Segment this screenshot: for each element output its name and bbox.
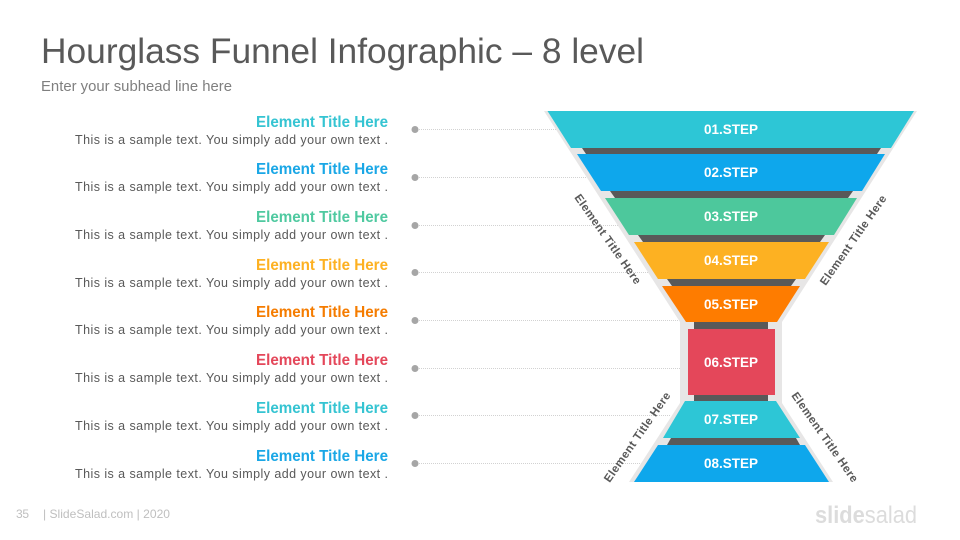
step 4: [634, 242, 829, 279]
text block 2: Element Title Here: [256, 161, 388, 178]
step 7: 07.STEP: [704, 412, 758, 427]
text block 8: This is a sample text. You simply add your own text .: [75, 467, 388, 481]
text block 4: Element Title Here: [256, 257, 388, 274]
page number: 35: [16, 507, 29, 521]
text block 7: This is a sample text. You simply add your own text .: [75, 419, 388, 433]
text block 8: Element Title Here: [256, 448, 388, 465]
rotated label upper right: Element Title Here: [818, 193, 889, 288]
text block 7: Element Title Here: [256, 400, 388, 417]
step 4: 04.STEP: [704, 253, 758, 268]
text block 3: [75, 209, 388, 242]
step 8: [634, 445, 829, 482]
funnel outline: [544, 111, 917, 482]
text block 3: Element Title Here: [256, 209, 388, 226]
text block 6: This is a sample text. You simply add your own text .: [75, 371, 388, 385]
leader lines with dots: [412, 126, 690, 467]
step 2: 02.STEP: [704, 165, 758, 180]
text block 5: [75, 304, 388, 337]
title: Hourglass Funnel Infographic – 8 level: [41, 32, 644, 71]
step 1: [548, 111, 914, 148]
step 5: 05.STEP: [704, 297, 758, 312]
text block 4: [75, 257, 388, 290]
step 3: [605, 198, 857, 235]
connectors: [582, 148, 881, 445]
text block 1: This is a sample text. You simply add your own text .: [75, 133, 388, 147]
footer text: | SlideSalad.com | 2020: [43, 507, 170, 521]
rotated label lower left: Element Title Here: [602, 390, 673, 485]
logo: slidesalad: [815, 502, 917, 529]
subhead: Enter your subhead line here: [41, 79, 232, 95]
text block 3: This is a sample text. You simply add your own text .: [75, 228, 388, 242]
hourglass funnel: [544, 111, 917, 482]
rotated label upper left: Element Title Here: [572, 192, 643, 287]
text block 1: [75, 114, 388, 147]
text block 5: This is a sample text. You simply add your own text .: [75, 323, 388, 337]
text block 7: [75, 400, 388, 433]
step 6: 06.STEP: [704, 355, 758, 370]
rotated label lower right: Element Title Here: [789, 390, 860, 485]
step 7: [663, 401, 800, 438]
step 6: [688, 329, 775, 395]
text block 2: This is a sample text. You simply add your own text .: [75, 180, 388, 194]
text block 2: [75, 161, 388, 194]
step 3: 03.STEP: [704, 209, 758, 224]
text block 5: Element Title Here: [256, 304, 388, 321]
text block 8: [75, 448, 388, 481]
step 2: [577, 154, 885, 191]
step 5: [662, 286, 800, 322]
text block 1: Element Title Here: [256, 114, 388, 131]
step 8: 08.STEP: [704, 456, 758, 471]
step 1: 01.STEP: [704, 122, 758, 137]
text block 6: Element Title Here: [256, 352, 388, 369]
text block list: [75, 114, 388, 481]
text block 4: This is a sample text. You simply add your own text .: [75, 276, 388, 290]
text block 6: [75, 352, 388, 385]
